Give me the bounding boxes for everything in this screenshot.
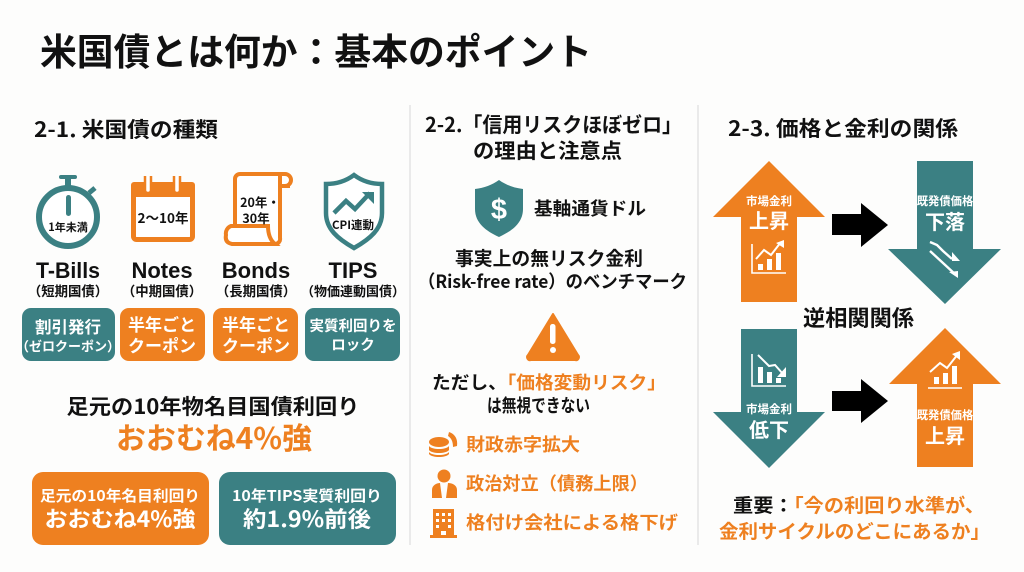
arrow: price fall: 下落 bbox=[925, 206, 965, 235]
callout: key point bbox=[719, 491, 990, 544]
callout: key point: 重要：「今の利回り水準が、 bbox=[733, 491, 985, 518]
icon: warning triangle bbox=[527, 314, 579, 360]
text: key currency: 基軸通貨ドル bbox=[534, 195, 646, 221]
text: price risk warning bbox=[432, 369, 666, 418]
card: TIPS real yield: 10年TIPS実質利回り bbox=[232, 485, 382, 506]
panel: price and yield bbox=[713, 113, 1001, 544]
text: price risk warning: は無視できない bbox=[487, 392, 590, 418]
icon: stopwatch: 1年未満 bbox=[48, 219, 88, 235]
heading 2-1: 2-1. 米国債の種類 bbox=[34, 114, 218, 144]
card: nominal yield: 足元の10年名目利回り bbox=[40, 485, 200, 506]
arrow: yield decline bbox=[713, 329, 825, 468]
arrow: yield decline: 低下 bbox=[749, 414, 789, 443]
label: Bonds: Bonds bbox=[222, 258, 290, 283]
arrow: yield rise: 市場金利 bbox=[746, 193, 792, 209]
icon: dollar shield: $ bbox=[491, 194, 507, 226]
icon: scroll bbox=[226, 174, 291, 244]
card: TIPS real yield bbox=[219, 472, 396, 545]
label: T-Bills: （短期国債） bbox=[28, 280, 108, 300]
title: 米国債とは何か：基本のポイント bbox=[40, 22, 592, 76]
label: TIPS: （物価連動国債） bbox=[301, 281, 405, 300]
icon: scroll: 20年・ bbox=[240, 192, 280, 211]
heading 2-2: の理由と注意点 bbox=[473, 134, 622, 164]
text: risk-free benchmark bbox=[418, 244, 687, 294]
heading 2-3: 2-3. 価格と金利の関係 bbox=[728, 113, 958, 143]
arrow: yield decline: 市場金利 bbox=[746, 401, 792, 417]
icon: stopwatch bbox=[39, 175, 97, 246]
badge: bonds coupon: 半年ごと bbox=[222, 311, 290, 336]
badge: notes coupon bbox=[120, 308, 205, 361]
icon: shield with chart: CPI連動 bbox=[332, 217, 374, 233]
badge: notes coupon: クーポン bbox=[128, 332, 196, 357]
text: current 10-year yield bbox=[66, 391, 360, 458]
badge: real yield lock bbox=[305, 308, 400, 361]
risk item: fiscal deficit: 財政赤字拡大 bbox=[466, 431, 580, 457]
icon: calendar bbox=[131, 176, 195, 240]
label: Bonds: （長期国債） bbox=[216, 280, 296, 300]
icon: scroll: 30年 bbox=[242, 208, 270, 227]
icon: shield with chart bbox=[326, 175, 382, 248]
badge: bonds coupon: クーポン bbox=[222, 332, 290, 357]
badge: discount issue: （ゼロクーポン） bbox=[16, 336, 120, 355]
label: T-Bills: T-Bills bbox=[36, 258, 100, 283]
panel: types of treasuries bbox=[16, 114, 405, 545]
badge: discount issue: 割引発行 bbox=[35, 314, 101, 338]
label: TIPS bbox=[301, 258, 405, 300]
label: Notes bbox=[122, 258, 202, 300]
risk item: political conflict: 政治対立（債務上限） bbox=[466, 470, 648, 496]
text: price risk warning: ただし、「価格変動リスク」 bbox=[432, 369, 666, 395]
text: current 10-year yield: 足元の10年物名目国債利回り bbox=[66, 391, 360, 421]
arrow: black arrow bottom bbox=[832, 379, 888, 423]
arrow: price fall bbox=[888, 161, 1001, 304]
label: T-Bills bbox=[28, 258, 108, 300]
arrow: yield rise bbox=[713, 161, 825, 302]
label: Notes: Notes bbox=[131, 258, 193, 283]
badge: notes coupon: 半年ごと bbox=[128, 311, 196, 336]
card: nominal yield: おおむね4%強 bbox=[44, 502, 196, 534]
risk item: downgrade: 格付け会社による格下げ bbox=[466, 509, 678, 535]
arrow: price rise bbox=[889, 328, 1001, 467]
arrow: black arrow top bbox=[832, 203, 888, 247]
label: Notes: （中期国債） bbox=[122, 280, 202, 300]
text: current 10-year yield: おおむね4%強 bbox=[116, 414, 312, 458]
callout: key point: 金利サイクルのどこにあるか」 bbox=[719, 517, 990, 544]
card: nominal yield bbox=[32, 472, 209, 545]
text: risk-free benchmark: （Risk-free rate）のベンチマーク bbox=[418, 268, 687, 294]
icon: calendar: 2〜10年 bbox=[138, 207, 188, 227]
heading 2-2 bbox=[425, 108, 682, 164]
text: risk-free benchmark: 事実上の無リスク金利 bbox=[455, 244, 643, 271]
heading 2-2: 2-2.「信用リスクほぼゼロ」 bbox=[425, 108, 682, 138]
arrow: price fall: 既発債価格 bbox=[917, 193, 974, 209]
arrow: yield rise: 上昇 bbox=[749, 205, 789, 234]
badge: real yield lock: ロック bbox=[331, 334, 375, 355]
arrow: price rise: 上昇 bbox=[925, 420, 965, 449]
badge: real yield lock: 実質利回りを bbox=[310, 315, 396, 336]
card: TIPS real yield: 約1.9%前後 bbox=[243, 502, 371, 534]
label: Bonds bbox=[216, 258, 296, 300]
icon: dollar shield bbox=[475, 180, 523, 237]
badge: bonds coupon bbox=[213, 308, 298, 361]
arrow: price rise: 既発債価格 bbox=[917, 407, 974, 423]
label: TIPS: TIPS bbox=[329, 258, 377, 283]
text: inverse relationship: 逆相関関係 bbox=[803, 301, 914, 333]
panel: credit risk bbox=[418, 108, 687, 538]
badge: discount issue bbox=[16, 308, 120, 361]
